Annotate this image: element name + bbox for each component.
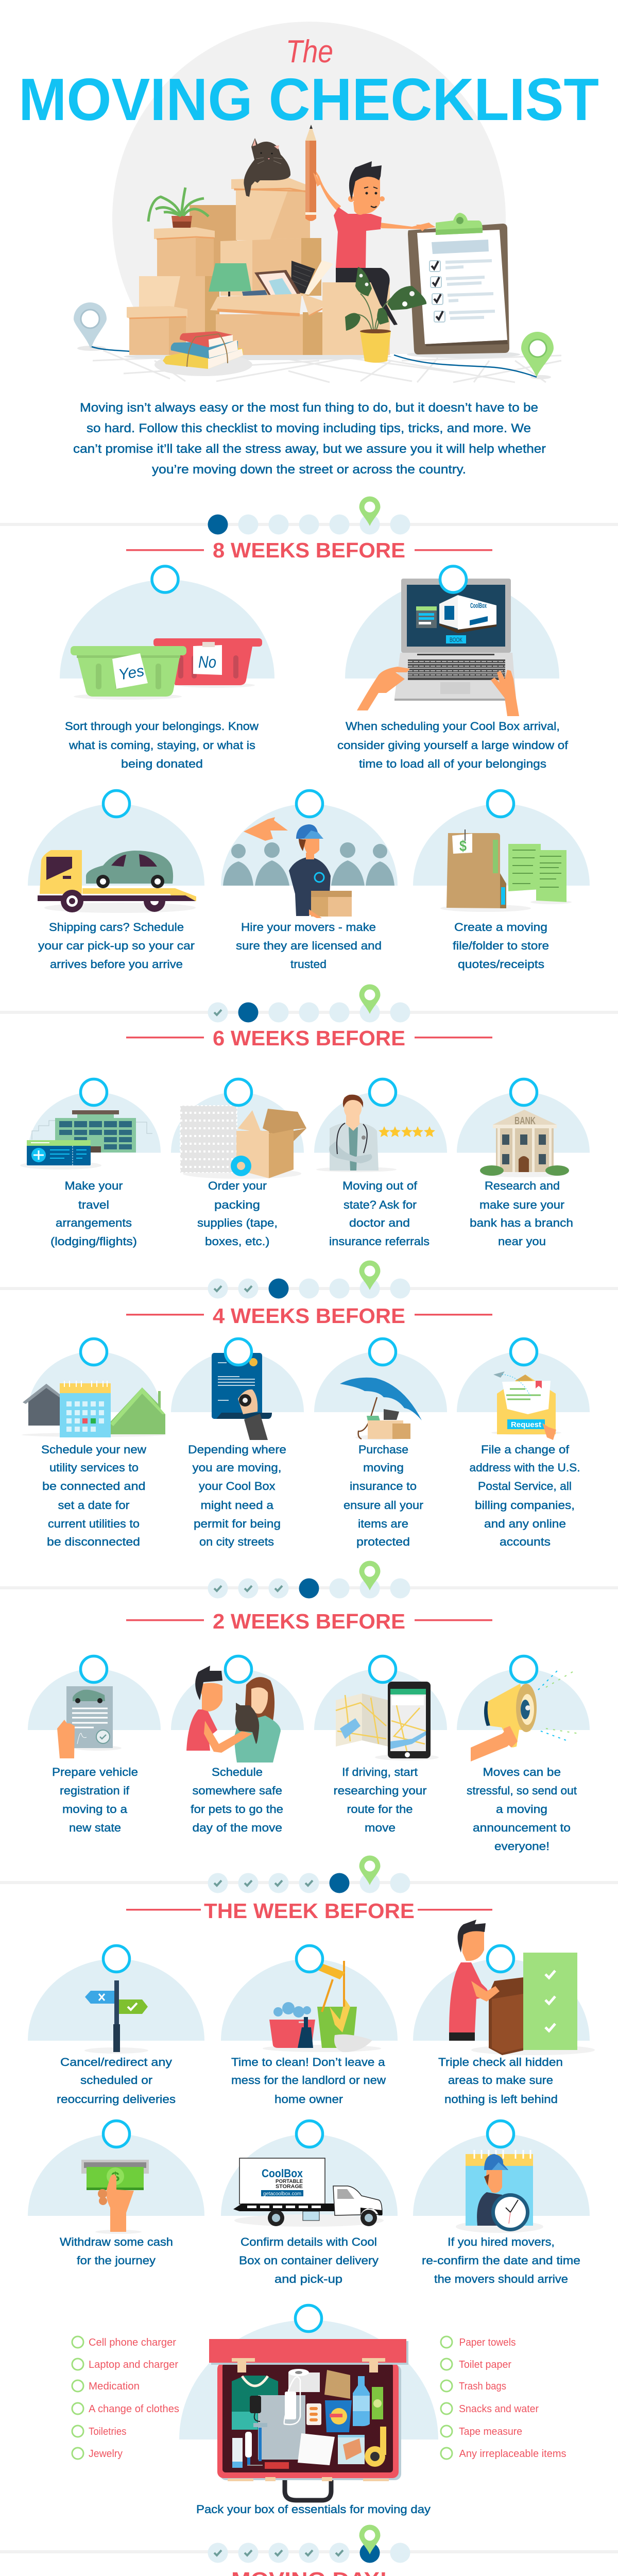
toilet roll: [288, 2372, 320, 2392]
street map: [93, 350, 561, 382]
icon: yes and no baskets: No: [198, 653, 216, 671]
illustration: moving boxes, man and clipboard: [74, 125, 561, 382]
text: arrangements: [56, 1216, 132, 1229]
bottle: [353, 2376, 370, 2426]
icon: laptop: BOOK: [450, 636, 462, 643]
panel: travel arrangements: [20, 1079, 161, 1248]
scissors and comb: [247, 2465, 263, 2466]
icon: yes and no baskets: Yes: [117, 663, 146, 684]
text: File a change of: [481, 1443, 570, 1456]
text: current utilities to: [48, 1517, 140, 1530]
timeline progress: [0, 1855, 618, 1893]
open box: [210, 294, 329, 355]
panel: permit: [171, 1338, 304, 1548]
paper: [298, 2433, 335, 2465]
ring: [511, 1338, 537, 1365]
left checklist: [72, 2336, 179, 2460]
icon: mover chosen from crowd: [223, 817, 394, 918]
text: [57, 2056, 176, 2106]
large left box: [139, 276, 219, 338]
lamp: [209, 263, 251, 302]
text: items are: [358, 1517, 408, 1530]
pencil: [305, 125, 316, 221]
cat: [244, 138, 290, 197]
panel: vehicle registration: [28, 1656, 161, 1834]
text: stressful, so send out: [467, 1784, 577, 1797]
icon: laptop: [357, 579, 519, 716]
text: Confirm details with Cool: [241, 2235, 377, 2248]
text: utility services to: [49, 1461, 139, 1474]
text: Depending where: [188, 1443, 286, 1456]
bottom left box: [127, 306, 187, 355]
books: [163, 331, 243, 369]
location pin: end: [521, 332, 554, 379]
panel: bank research: [457, 1079, 590, 1248]
text: Cancel/redirect any: [60, 2056, 172, 2069]
text: [438, 2056, 563, 2106]
icon: registration document: [57, 1686, 122, 1758]
icon: signpost: [84, 1980, 148, 2054]
text: be disconnected: [47, 1535, 140, 1548]
text: Moving out of: [342, 1179, 418, 1192]
text: for pets to go the: [191, 1803, 283, 1816]
text: somewhere safe: [193, 1784, 282, 1797]
right checklist: Trash bags: [459, 2381, 506, 2392]
icon: tow truck with car: [38, 850, 196, 913]
ring: [226, 1656, 251, 1683]
panel: utilities: [22, 1338, 166, 1548]
ring: [370, 1338, 396, 1365]
text: file/folder to store: [453, 939, 549, 952]
text: insurance to: [350, 1480, 417, 1493]
text: mess for the landlord or new: [231, 2074, 386, 2087]
icon: man checking drawers: [449, 1920, 595, 2055]
left checklist: Jewelry: [89, 2448, 123, 2460]
text: Moves can be: [483, 1766, 561, 1778]
icon: permit document and stamp: [212, 1353, 272, 1440]
title: Moving Checklist: MOVING CHECKLIST: [19, 66, 599, 133]
heading: [126, 1609, 492, 1633]
timeline progress: [0, 984, 618, 1022]
ring: [226, 1338, 251, 1365]
left checklist: A change of clothes: [89, 2403, 179, 2415]
icon: bank: BANK: [514, 1115, 536, 1127]
panel: pets: [171, 1656, 304, 1834]
heading: 6 WEEKS BEFORE: [213, 1026, 405, 1050]
ring: [487, 1945, 514, 1972]
text: [60, 2235, 173, 2267]
text: [470, 1443, 580, 1548]
text: what is coming, staying, or what is: [68, 739, 255, 752]
text: make sure your: [479, 1198, 564, 1211]
text: Triple check all hidden: [438, 2056, 563, 2069]
heading: 8 WEEKS BEFORE: [213, 538, 405, 562]
icon: folder and receipts: [440, 829, 572, 912]
text: and any online: [484, 1517, 566, 1530]
text: near you: [498, 1235, 546, 1248]
text: permit for being: [194, 1517, 281, 1530]
panel: cancel deliveries: [28, 1945, 204, 2106]
text: [38, 921, 195, 971]
text: reoccurring deliveries: [57, 2093, 176, 2106]
text: scheduled or: [80, 2074, 152, 2087]
text: address with the U.S.: [470, 1461, 580, 1474]
icon: laptop: CoolBox: [470, 601, 487, 609]
left checklist: Toiletries: [89, 2426, 127, 2437]
right box: [322, 282, 390, 355]
text: new state: [69, 1821, 121, 1834]
panel: box of essentials: [72, 2305, 566, 2516]
background circle: [112, 22, 506, 354]
panel: route: [314, 1656, 447, 1834]
text: Schedule your new: [41, 1443, 146, 1456]
text: insurance referrals: [329, 1235, 430, 1248]
icon: folder and receipts: $: [459, 838, 467, 855]
caption: Pack your box of essentials for moving day: [196, 2503, 431, 2516]
icon: hotel and ticket: [20, 1110, 152, 1170]
laptop: [258, 2395, 305, 2460]
text: bank has a branch: [470, 1216, 573, 1229]
text: Make your: [65, 1179, 123, 1192]
text: trusted: [290, 958, 327, 971]
heading: [126, 1899, 492, 1923]
left checklist: Medication: [89, 2381, 140, 2392]
panel: re-confirm movers: [413, 2121, 590, 2285]
icon: cash machine: [81, 2160, 149, 2234]
right checklist: Toilet paper: [459, 2359, 511, 2370]
timeline progress: [0, 496, 618, 535]
text: Schedule: [212, 1766, 263, 1778]
panel: announcement: [457, 1656, 590, 1853]
right checklist: Tape measure: [459, 2426, 522, 2437]
timeline progress: [0, 1260, 618, 1298]
text: If you hired movers,: [448, 2235, 555, 2248]
text: and pick-up: [274, 2273, 342, 2285]
text: Purchase: [358, 1443, 408, 1456]
ring: [511, 1656, 537, 1683]
text: arrives before you arrive: [50, 958, 183, 971]
text: travel: [78, 1198, 109, 1211]
text: Research and: [485, 1179, 560, 1192]
ring: [80, 1656, 107, 1683]
icon: cleaning supplies: [263, 1961, 381, 2052]
right checklist: [441, 2336, 566, 2460]
text: your Cool Box: [199, 1480, 275, 1493]
icon: map and phone: [336, 1682, 439, 1760]
text: registration if: [60, 1784, 130, 1797]
ring: [370, 1656, 396, 1683]
panel: moving file: [413, 790, 590, 971]
text: Time to clean! Don’t leave a: [231, 2056, 385, 2069]
back box: [190, 205, 237, 269]
icon: doctor with rating: [316, 1095, 435, 1172]
right checklist: Any irreplaceable items: [459, 2448, 566, 2460]
text: researching your: [334, 1784, 426, 1797]
icon: open suitcase with essentials: [209, 2339, 408, 2500]
section: moving day: [0, 2524, 618, 2576]
icon: bank: [480, 1110, 569, 1177]
text: [231, 2056, 386, 2106]
middle box: [220, 238, 321, 296]
text: Shipping cars? Schedule: [49, 921, 184, 934]
ring: [296, 2305, 321, 2332]
panel: shipping cars: [28, 790, 204, 971]
text: the movers should arrive: [434, 2273, 568, 2285]
text: boxes, etc.): [205, 1235, 270, 1248]
section: 2 weeks before: [0, 1561, 618, 1853]
text: accounts: [500, 1535, 551, 1548]
tube and keyboard: [291, 260, 333, 295]
text: a moving: [496, 1803, 547, 1816]
toiletries: [232, 2438, 243, 2468]
text: re-confirm the date and time: [422, 2254, 580, 2267]
text: [65, 720, 259, 770]
ring: [440, 566, 467, 592]
text: Order your: [208, 1179, 267, 1192]
text: [334, 1766, 426, 1834]
right checklist: Snacks and water: [459, 2403, 539, 2415]
plant: [148, 188, 209, 228]
text: be connected and: [42, 1480, 145, 1493]
left checklist: Cell phone charger: [89, 2337, 176, 2348]
icon: flatbed truck with Cool Box: [233, 2158, 384, 2227]
text: doctor and: [349, 1216, 410, 1229]
ring: [370, 1079, 396, 1106]
text: your car pick-up so your car: [38, 939, 195, 952]
intro paragraph: Moving isn’t always easy or the most fun thing to do, but it doesn’t have to be: [80, 401, 538, 415]
monstera plant and yellow pot: [345, 267, 426, 363]
intro paragraph: so hard. Follow this checklist to moving including tips, tricks, and more. We: [87, 421, 531, 435]
text: route for the: [347, 1803, 413, 1816]
arm over pencil: [313, 173, 320, 187]
text: Sort through your belongings. Know: [65, 720, 259, 733]
section: hero: [19, 22, 599, 477]
text: [422, 2235, 580, 2285]
text: sure they are licensed and: [236, 939, 382, 952]
text: billing companies,: [475, 1499, 575, 1512]
text: you are moving,: [193, 1461, 281, 1474]
text: nothing is left behind: [444, 2093, 558, 2106]
icon: flatbed truck with Cool Box: getacoolbox.com: [263, 2191, 301, 2197]
tower box: [231, 178, 310, 240]
text: Postal Service, all: [478, 1480, 572, 1493]
text: [329, 1179, 430, 1248]
panel: schedule arrival: [337, 566, 569, 770]
text: areas to make sure: [448, 2074, 553, 2087]
heading: [126, 1026, 492, 1050]
icon: couple with cat: [186, 1666, 281, 1762]
panel: hire movers: [221, 790, 398, 971]
icon: mover, calendar and clock: [456, 2150, 543, 2233]
text: move: [365, 1821, 396, 1834]
text: supplies (tape,: [197, 1216, 278, 1229]
clipboard: [408, 213, 509, 354]
timeline progress: [0, 2524, 618, 2563]
ring: [103, 2121, 130, 2147]
text: time to load all of your belongings: [359, 757, 546, 770]
text: protected: [356, 1535, 410, 1548]
text: [236, 921, 382, 971]
picture frame: [242, 270, 301, 296]
ring: [103, 790, 130, 817]
text: Prepare vehicle: [52, 1766, 138, 1778]
panel: withdraw cash: [28, 2121, 204, 2267]
text: (lodging/flights): [50, 1235, 137, 1248]
panel: packing supplies: [171, 1079, 306, 1248]
section: 4 weeks before: [0, 1260, 618, 1548]
cable: [284, 2377, 300, 2425]
right checklist: Paper towels: [459, 2337, 516, 2348]
icon: envelope with request: Request: [511, 1420, 541, 1429]
text: [453, 921, 549, 971]
text: [188, 1443, 286, 1548]
text: everyone!: [494, 1840, 550, 1853]
tape measure: [380, 2427, 386, 2455]
text: [470, 1179, 573, 1248]
ring: [226, 1079, 251, 1106]
ring: [487, 790, 514, 817]
text: [52, 1766, 138, 1834]
sandwich: [338, 2435, 365, 2464]
ring: [297, 790, 322, 817]
text: Withdraw some cash: [60, 2235, 173, 2248]
ring: [80, 1338, 107, 1365]
ring: [80, 1079, 107, 1106]
ground shadows: [124, 353, 391, 360]
text: being donated: [121, 757, 203, 770]
text: moving to a: [62, 1803, 128, 1816]
text: Create a moving: [454, 921, 547, 934]
icon: box, bubble wrap and tape: [180, 1106, 306, 1179]
section: 8 weeks before: [0, 496, 618, 971]
icon: umbrella over boxes: [340, 1378, 422, 1440]
left checklist: Laptop and charger: [89, 2359, 178, 2370]
route line: [92, 347, 537, 377]
icon: flatbed truck with Cool Box: STORAGE: [276, 2184, 303, 2190]
intro paragraph: you’re moving down the street or across the country.: [152, 463, 466, 477]
text: consider giving yourself a large window of: [337, 739, 569, 752]
icon: flatbed truck with Cool Box: CoolBox: [262, 2167, 303, 2180]
text: [50, 1179, 137, 1248]
timeline progress: [0, 1561, 618, 1598]
icon: cash machine: $: [111, 2169, 120, 2184]
text: Box on container delivery: [239, 2254, 379, 2267]
heading: THE WEEK BEFORE: [204, 1899, 415, 1923]
icon: flatbed truck with Cool Box: PORTABLE: [276, 2179, 303, 2184]
ring: [487, 2121, 514, 2147]
bag: [324, 2370, 350, 2399]
title: The: The: [286, 34, 333, 70]
text: [239, 2235, 379, 2285]
text: [467, 1766, 577, 1853]
section: the week before: [0, 1855, 618, 2516]
heading: [126, 538, 492, 562]
text: Hire your movers - make: [241, 921, 376, 934]
panel: change of address: [457, 1338, 590, 1548]
left stack box: [154, 227, 215, 277]
shirt: [232, 2376, 278, 2430]
text: quotes/receipts: [458, 958, 544, 971]
text: announcement to: [473, 1821, 571, 1834]
heading: 2 WEEKS BEFORE: [213, 1609, 405, 1633]
text: [191, 1766, 283, 1834]
text: When scheduling your Cool Box arrival,: [346, 720, 560, 733]
ring: [297, 1945, 322, 1972]
chips: [325, 2400, 352, 2432]
text: home owner: [274, 2093, 343, 2106]
text: set a date for: [58, 1499, 130, 1512]
panel: insurance: [314, 1338, 447, 1548]
ring: [511, 1079, 537, 1106]
intro paragraph: [73, 401, 546, 477]
text: ensure all your: [344, 1499, 423, 1512]
panel: clean: [221, 1945, 398, 2106]
icon: megaphone: [471, 1669, 579, 1761]
text: If driving, start: [342, 1766, 418, 1778]
text: state? Ask for: [344, 1198, 417, 1211]
icon: houses and calendar: [22, 1381, 166, 1437]
location pin: start: [74, 302, 107, 351]
text: [41, 1443, 146, 1548]
icon: envelope with request: [491, 1371, 561, 1440]
panel: confirm details: [221, 2121, 398, 2285]
intro paragraph: can’t promise it’ll take all the stress away, but we assure you it will help whether: [73, 442, 546, 456]
text: [337, 720, 569, 770]
section: 6 weeks before: [0, 984, 618, 1248]
heading: 4 WEEKS BEFORE: [213, 1304, 405, 1328]
text: [197, 1179, 278, 1248]
panel: doctor referrals: [314, 1079, 447, 1248]
text: on city streets: [199, 1535, 274, 1548]
text: moving: [363, 1461, 404, 1474]
text: [344, 1443, 423, 1548]
ring: [297, 2121, 322, 2147]
heading: [126, 1304, 492, 1328]
text: for the journey: [77, 2254, 156, 2267]
text: day of the move: [193, 1821, 282, 1834]
text: packing: [214, 1198, 260, 1211]
pills: [306, 2403, 321, 2425]
panel: triple check: [413, 1920, 595, 2106]
snack bar: [372, 2387, 383, 2419]
text: might need a: [201, 1499, 274, 1512]
icon: yes and no baskets: [71, 638, 262, 700]
ring: [103, 1945, 130, 1972]
ring: [152, 566, 178, 592]
man: [313, 161, 434, 325]
panel: sort belongings: [60, 566, 274, 770]
charger: [250, 2396, 261, 2413]
